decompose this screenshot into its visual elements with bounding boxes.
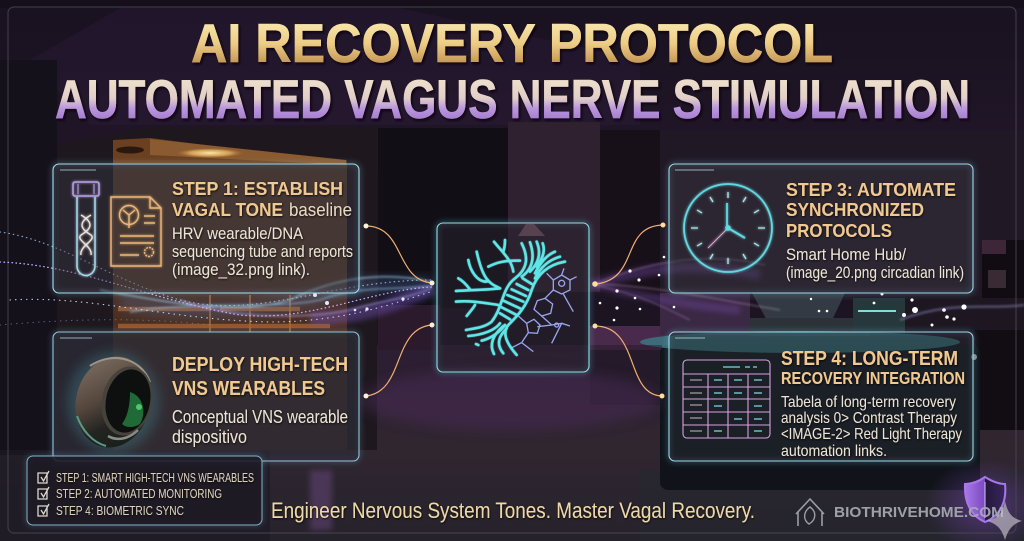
- wearables heading: VNS WEARABLES: [172, 377, 325, 400]
- checklist item 1: STEP 1: SMART HIGH-TECH VNS WEARABLES: [56, 471, 254, 485]
- step 1 body: [172, 224, 353, 279]
- icon: DNA test tube: [73, 182, 99, 276]
- wearables heading: DEPLOY HIGH-TECH: [172, 353, 348, 376]
- step 4 body: <IMAGE-2> Red Light Therapy: [781, 426, 962, 443]
- step 3 heading: PROTOCOLS: [786, 220, 892, 241]
- panel: step 4: [669, 332, 973, 461]
- wearables body: dispositivo: [172, 427, 247, 447]
- icon: clock: [684, 184, 772, 272]
- step 4 body: [781, 394, 962, 460]
- step 3 heading: STEP 3: AUTOMATE: [786, 179, 956, 200]
- icon: sparkle: [987, 501, 1022, 540]
- neural data wave: right: [592, 256, 1024, 360]
- wearables body: Conceptual VNS wearable: [172, 407, 348, 427]
- panel: central nerve hub: [437, 223, 589, 372]
- connector: step 1 to hub: [364, 224, 434, 286]
- connector: wearables to hub: [364, 322, 434, 398]
- connector: hub to step 4: [592, 324, 664, 398]
- title: [55, 12, 970, 130]
- panel: step 1: [53, 164, 359, 293]
- table: [660, 345, 980, 490]
- step 3 heading: SYNCHRONIZED: [786, 199, 924, 220]
- step 4 body: analysis 0> Contrast Therapy: [781, 410, 957, 427]
- step 4 body: Tabela of long-term recovery: [781, 394, 956, 411]
- icon: shield: [965, 477, 1005, 522]
- neural data wave: left: [0, 232, 432, 325]
- checklist item 2: STEP 2: AUTOMATED MONITORING: [56, 487, 222, 501]
- step 1 body: sequencing tube and reports: [172, 242, 353, 261]
- lamp seen through hub: [518, 224, 545, 236]
- sofa: [378, 305, 440, 350]
- tagline: Engineer Nervous System Tones. Master Vagal Recovery.: [271, 498, 755, 523]
- step 1 heading: STEP 1: ESTABLISH: [172, 178, 343, 199]
- dark doors: [378, 128, 510, 308]
- connector: hub to step 3: [592, 222, 666, 287]
- step 1 body: HRV wearable/DNA: [172, 224, 304, 243]
- brand logo: BIOTHRIVEHOME.COM: [834, 504, 1004, 521]
- sauna cabin: [57, 127, 377, 450]
- step 1 body: (image_32.png link).: [172, 260, 310, 279]
- coffee machine: [982, 240, 1024, 298]
- icon: vagus nerve: [456, 240, 565, 355]
- step 4 heading: RECOVERY INTEGRATION: [781, 368, 965, 388]
- step 3 body: (image_20.png circadian link): [786, 264, 964, 282]
- icon: VNS smart ring: [66, 348, 160, 456]
- step 4 heading: STEP 4: LONG-TERM: [781, 348, 958, 370]
- step 1 heading: VAGAL TONE: [172, 199, 283, 220]
- floor reflections: [310, 470, 332, 530]
- step 3 heading: [786, 179, 956, 241]
- panel: checklist: [27, 456, 262, 525]
- wearables body: [172, 407, 348, 447]
- step 4 heading: [781, 348, 965, 388]
- title: AI RECOVERY PROTOCOL: [191, 12, 833, 74]
- checklist item 3: STEP 4: BIOMETRIC SYNC: [56, 504, 184, 518]
- icon: data table: [683, 360, 770, 438]
- checklist item 1: [38, 471, 254, 485]
- step 1 heading: baseline: [289, 199, 352, 220]
- step 1 heading: [172, 178, 352, 220]
- panel: deploy wearables: [53, 332, 359, 461]
- brand logo: [796, 499, 1004, 526]
- icon: molecule: [511, 268, 577, 352]
- icon: report document: [111, 197, 161, 266]
- panel: step 3: [669, 164, 973, 293]
- step 3 body: [786, 246, 964, 282]
- step 3 body: Smart Home Hub/: [786, 246, 906, 264]
- step 4 body: automation links.: [781, 443, 887, 460]
- wearables heading: [172, 353, 348, 400]
